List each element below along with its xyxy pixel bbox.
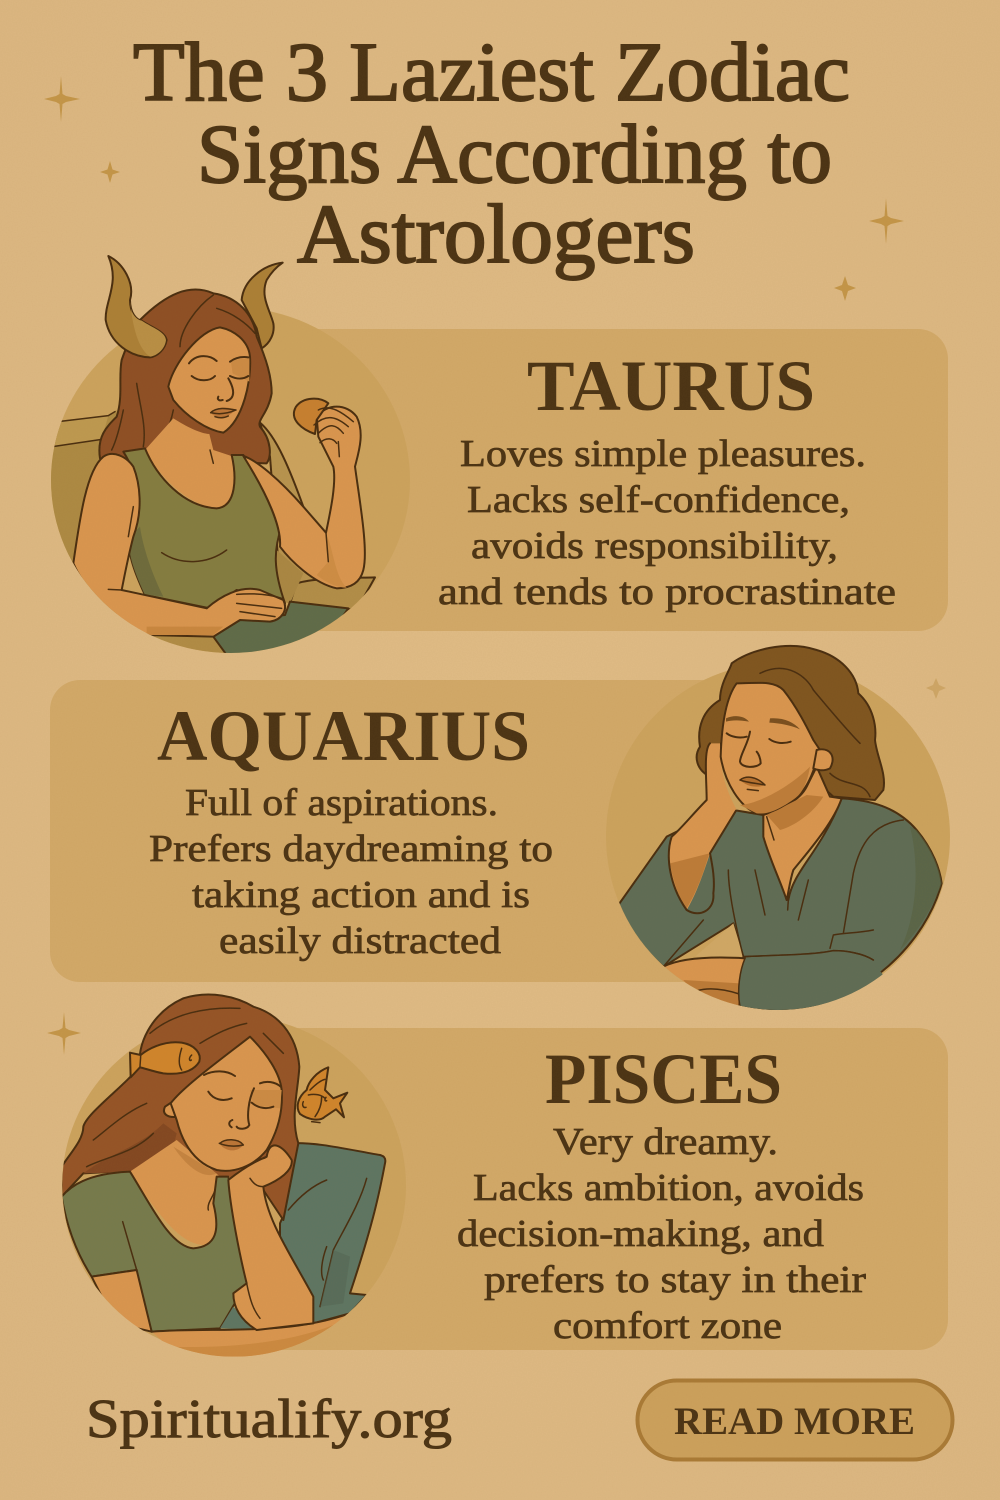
read more button: READ MORE <box>674 1400 915 1443</box>
pisces card background <box>230 1028 948 1350</box>
text block: taurus: Loves simple pleasures. <box>460 433 866 475</box>
blanket under arm <box>220 1306 252 1329</box>
aquarius card background <box>50 680 730 982</box>
text block: aquarius <box>149 782 553 962</box>
face <box>171 1037 282 1171</box>
torso tank top <box>123 448 285 608</box>
heading: aquarius: AQUARIUS <box>157 696 530 776</box>
right horn <box>242 263 283 348</box>
aquarius circle <box>606 663 950 1010</box>
read more button <box>638 1380 952 1460</box>
lower body <box>153 1314 346 1356</box>
panel: taurus <box>50 256 948 655</box>
text block: pisces: Very dreamy. <box>553 1121 778 1163</box>
taurus card background <box>270 329 948 631</box>
illustration: taurus woman with horns eating a snack <box>50 256 375 655</box>
shirt creases <box>663 820 903 967</box>
text block: aquarius: Full of aspirations. <box>185 782 498 824</box>
decorative sparkles <box>44 76 946 1146</box>
ear <box>162 1102 175 1118</box>
shirt <box>618 798 942 1010</box>
panel: aquarius <box>50 646 950 1010</box>
title: Astrologers <box>297 188 695 281</box>
propping arm <box>228 1145 313 1330</box>
lower arm and cuff <box>663 958 745 1010</box>
panel: pisces <box>62 995 948 1360</box>
title: The 3 Laziest Zodiac <box>133 26 850 119</box>
pillow <box>280 1143 385 1323</box>
text block: pisces <box>457 1121 866 1347</box>
neck and chest <box>145 418 235 508</box>
text block: taurus <box>438 433 896 613</box>
snack <box>294 399 328 434</box>
hair <box>62 995 299 1220</box>
text block: taurus: avoids responsibility, <box>471 525 838 567</box>
title <box>133 26 850 281</box>
text block: pisces: decision-making, and <box>457 1213 824 1255</box>
brows, eyes, nose and lips <box>204 1071 281 1129</box>
face <box>168 327 250 433</box>
hair <box>99 290 272 463</box>
right arm <box>243 407 365 588</box>
brows, eyes, nose and lips <box>726 716 800 729</box>
illustration: aquarius figure daydreaming with head on hand <box>618 646 942 1010</box>
footer website: Spiritualify.org <box>86 1388 452 1449</box>
title: Signs According to <box>197 108 832 201</box>
text block: aquarius: easily distracted <box>219 920 501 962</box>
text block: pisces: comfort zone <box>553 1305 782 1347</box>
taurus circle <box>51 307 410 653</box>
hair <box>697 646 884 800</box>
illustration: pisces woman sleeping on a pillow with fish <box>62 995 385 1360</box>
face <box>721 683 820 814</box>
text block: aquarius: taking action and is <box>192 874 530 916</box>
text block: taurus: Lacks self-confidence, <box>467 479 850 521</box>
supporting arm and hand <box>669 743 737 910</box>
left shoulder and arm <box>73 454 285 637</box>
top <box>62 1172 247 1332</box>
heading: pisces: PISCES <box>545 1039 782 1119</box>
text block: taurus: and tends to procrastinate <box>438 571 896 613</box>
blanket <box>213 602 348 655</box>
eyes, brows, nose and lips <box>189 356 248 401</box>
text block: pisces: prefers to stay in their <box>484 1259 866 1301</box>
floating fish <box>298 1067 347 1123</box>
pisces circle <box>62 1016 406 1356</box>
ear <box>813 749 833 770</box>
sleeve arm <box>92 1270 152 1332</box>
neck and chest <box>130 1140 237 1245</box>
neck <box>763 767 842 900</box>
text block: aquarius: Prefers daydreaming to <box>149 828 553 870</box>
left horn <box>106 256 167 357</box>
hair fish <box>130 1042 200 1077</box>
heading: taurus: TAURUS <box>527 346 815 426</box>
text block: pisces: Lacks ambition, avoids <box>473 1167 864 1209</box>
